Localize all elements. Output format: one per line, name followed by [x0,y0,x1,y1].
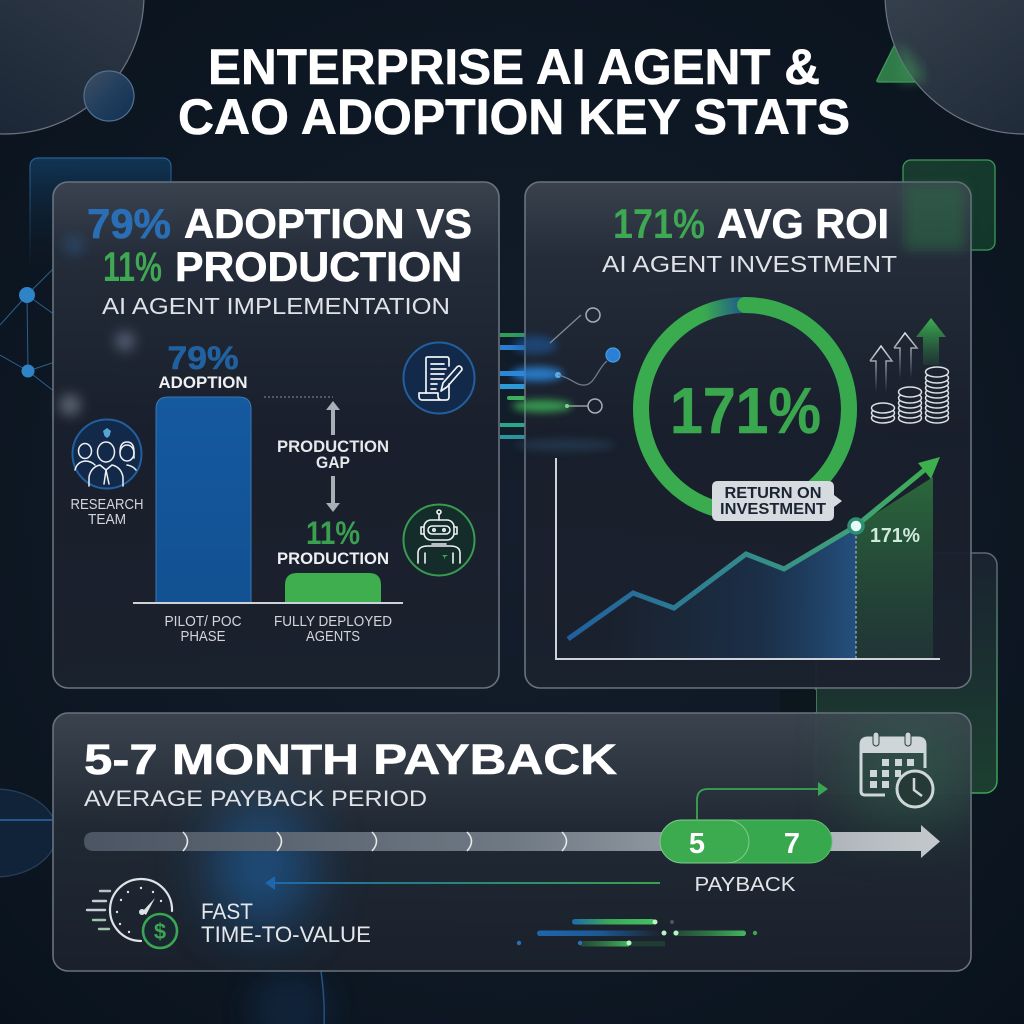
icon: gauge and dollar: $ [154,919,166,944]
heading: 79% adoption vs 11% production: 79% [87,200,171,247]
label: 11% production [277,515,389,568]
axis labels [164,614,392,645]
icon: calendar and clock [861,732,933,807]
chart: ROI growth [556,457,940,659]
subheading: average payback period: AVERAGE PAYBACK PERIOD [84,786,427,811]
title: ENTERPRISE AI AGENT & [208,39,820,95]
heading: 171% avg ROI [613,200,889,247]
green glow corner [905,185,965,250]
arrow: payback path [697,782,828,820]
payback pill: 5 to 7 [660,820,832,863]
label: fast time-to-value [201,899,371,947]
label: research team: TEAM [88,512,126,528]
heading: 79% adoption vs 11% production: 11% [103,243,162,290]
axis labels: PILOT/ POC [164,614,242,630]
label: research team: RESEARCH [70,497,144,513]
label: 171% on chart: 171% [870,525,920,547]
decorative ellipse: bottom left [0,789,57,877]
payback pill: 5 to 7: 7 [784,828,800,860]
production gap marker: GAP [316,454,350,472]
soft light spots [59,235,135,416]
bar axis [133,602,403,604]
decorative sphere: top left [0,0,144,134]
heading: 79% adoption vs 11% production: ADOPTION VS [184,200,472,247]
callout: return on investment [712,481,842,521]
icon: robot [404,504,474,576]
label: 11% production: 11% [306,515,360,551]
icon: coins and arrows [870,318,948,423]
decorative glass rectangle: right [780,553,997,793]
decorative glass rectangle: green [903,160,995,250]
production gap marker: PRODUCTION [277,438,389,456]
glow: blue [212,806,312,930]
glow: green [850,716,970,826]
label: fast time-to-value: FAST [201,899,253,924]
decorative sphere and triangle: top right [877,0,1024,134]
heading: 171% avg ROI: AVG ROI [717,200,889,247]
panel: AI agent implementation [53,182,499,688]
heading: 79% adoption vs 11% production [87,200,472,290]
glowing data lines [517,919,757,946]
subheading: AI agent investment: AI AGENT INVESTMENT [602,251,897,277]
panel: payback [53,713,971,971]
progress ring [641,305,849,513]
label: 79% adoption [158,340,248,392]
heading: 5-7 month payback: 5-7 MONTH PAYBACK [84,736,617,784]
axis labels: AGENTS [306,629,360,645]
payback pill: 5 to 7: 5 [689,828,705,860]
connector nodes and glowing lines [511,308,620,451]
arrow: back to start [265,876,660,890]
production gap marker [264,397,389,512]
connector stripes between panels [500,333,525,439]
heading: 171% avg ROI: 171% [613,200,705,247]
icon: document and pen [404,342,474,414]
label: 79% adoption: 79% [168,340,238,376]
icon: gauge and dollar [87,879,177,948]
heading: 79% adoption vs 11% production: PRODUCTION [175,243,462,290]
label: payback: PAYBACK [694,874,796,896]
label: research team [70,497,144,528]
panel: AI agent ROI [511,182,971,688]
decorative network nodes [0,262,60,392]
title [178,39,850,145]
timeline [84,825,940,858]
title: CAO ADOPTION KEY STATS [178,89,850,145]
bar: 79% pilot phase [156,397,251,603]
ring value: 171% [670,374,821,447]
axis labels: FULLY DEPLOYED [274,614,392,630]
callout: return on investment: INVESTMENT [720,501,827,518]
subheading: implementation: AI AGENT IMPLEMENTATION [102,293,450,319]
decorative arc: bottom [250,970,330,1024]
callout: return on investment: RETURN ON [724,485,822,502]
bar: 11% production [285,573,381,603]
icon: research team [72,420,142,488]
label: 79% adoption: ADOPTION [158,374,248,392]
label: fast time-to-value: TIME-TO-VALUE [201,922,371,947]
label: 11% production: PRODUCTION [277,550,389,568]
decorative glass rectangle: blue [30,158,171,268]
axis labels: PHASE [180,629,226,645]
